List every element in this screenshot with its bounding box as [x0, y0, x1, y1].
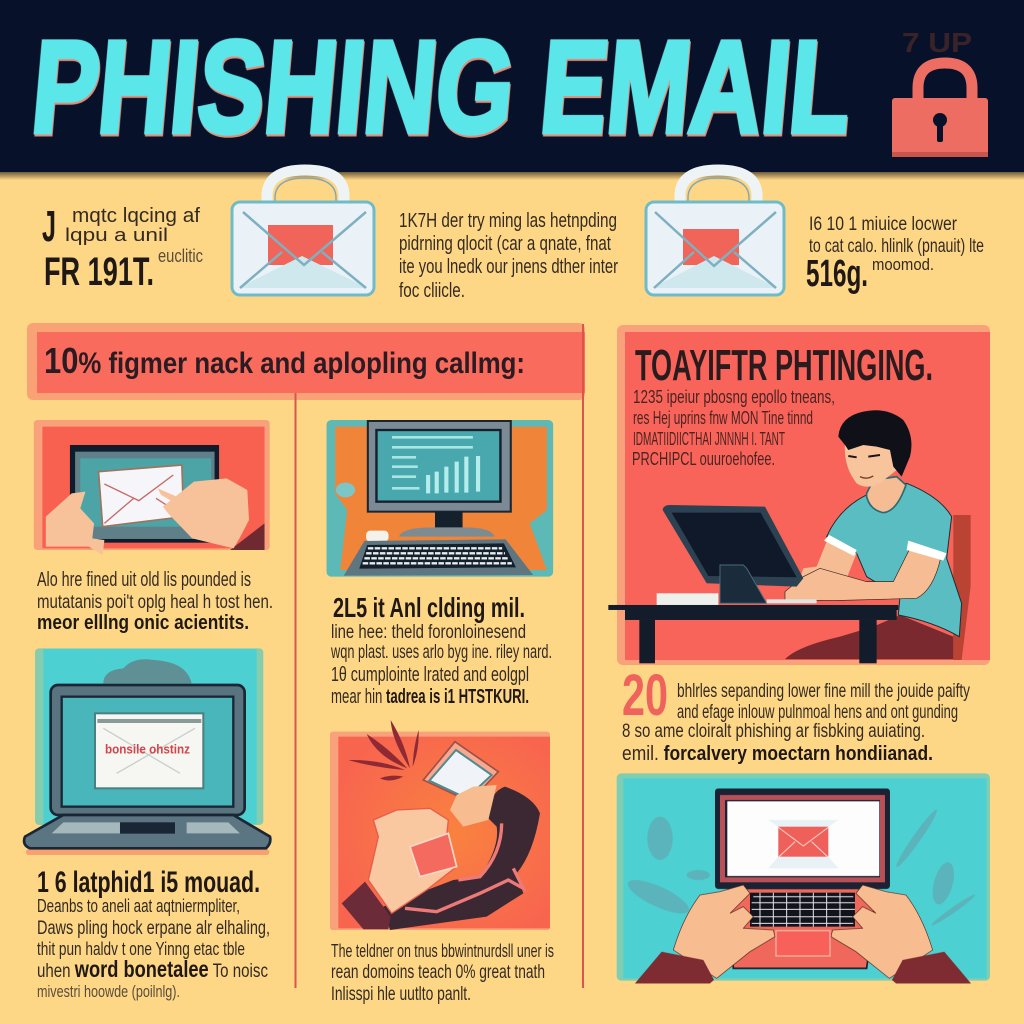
icon: envelope with lock right: [646, 170, 784, 295]
laptop: [715, 788, 890, 968]
panel: hands on tablet: [34, 420, 270, 555]
intro text right: moomod.: [872, 255, 934, 274]
callout: 20 statistic: emil. forcalvery moectarn hondiianad.: [622, 743, 933, 765]
intro text middle: ite you lnedk our jnens dther inter: [399, 256, 618, 278]
text block: first left: meor elllng onic acientits.: [37, 612, 249, 634]
text block: first left: [37, 569, 273, 634]
text block: second left: Daws pling hock erpane alr elhaling,: [37, 918, 270, 939]
header banner: [0, 0, 1024, 180]
intro text right: I6 10 1 miuice locwer: [809, 214, 958, 235]
lower hand: [368, 808, 457, 913]
text block: middle column lower: Inlisspi hle uutlto panlt.: [331, 984, 471, 1005]
text block: middle column upper: wqn plast. uses arlo byg ine. riley nard.: [330, 642, 552, 663]
intro text middle: foc cliicle.: [399, 280, 465, 302]
panel: left column heading: 10% figmer nack and aplopling callmg:: [44, 340, 525, 381]
intro text left: euclitic: [158, 246, 203, 266]
intro text left: [42, 202, 203, 294]
text block: first left: mutatanis poi't oplg heal h tost hen.: [37, 592, 273, 613]
text block: second left: uhen word bonetalee To noisc: [37, 956, 268, 982]
intro text middle: 1K7H der try ming las hetnpding: [399, 210, 617, 232]
text block: middle column lower: The teldner on tnus bbwintnurdsll uner is: [331, 941, 554, 961]
sleeve: [383, 787, 540, 930]
callout: 20 statistic: 8 so ame cloiralt phishing ar fisbking auiating.: [622, 721, 925, 742]
callout: 20 statistic: 20: [622, 663, 668, 728]
panel: laptop warning: [24, 648, 270, 855]
right hand: [831, 885, 971, 983]
text block: second left: 1 6 latphid1 i5 mouad.: [37, 866, 260, 899]
text block: second left: mivestri hoowde (poilnlg).: [37, 982, 180, 1001]
panel text: [632, 387, 835, 469]
person and desk: [608, 410, 971, 663]
monitor: [663, 505, 803, 603]
panel text: 1235 ipeiur pbosng epollo tneans,: [633, 387, 835, 407]
icon: right hand: [158, 478, 265, 550]
background smudges: [624, 807, 977, 927]
intro text right: [806, 214, 984, 295]
phone top: [423, 742, 498, 802]
intro text left: J: [42, 202, 56, 251]
intro text middle: [399, 210, 618, 302]
burst marks: [348, 720, 419, 780]
panel: desktop computer: [327, 420, 553, 577]
text block: middle column upper: 2L5 it Anl clding mil.: [333, 592, 525, 623]
text block: middle column lower: [331, 941, 554, 1005]
text block: middle column upper: mear hin tadrea is i1 HTSTKURI.: [331, 686, 529, 708]
icon: envelope with lock left: [232, 170, 374, 295]
screen lines and chart: [392, 437, 478, 493]
intro text right: 516g.: [806, 253, 868, 295]
panel text: PRCHIPCL ouuroehofee.: [632, 449, 775, 469]
panel text: IDMATIIDIICTHAI JNNNH I. TANT: [633, 429, 785, 449]
icon: padlock: [892, 27, 988, 157]
panel: left column heading: [27, 323, 585, 400]
panel: person at computer: [608, 325, 990, 665]
icon: padlock: 7 UP: [902, 27, 972, 58]
warning text: bonsile ohstinz: [105, 743, 190, 757]
text block: second left: Deanbs to aneli aat aqtniermpliter,: [37, 896, 240, 916]
icon: mail on screen: [768, 820, 838, 868]
intro text middle: pidrning qlocit (car a qnate, fnat: [399, 233, 611, 255]
intro text left: lqpu a unil: [65, 225, 168, 245]
text block: middle column upper: [330, 592, 552, 708]
left hand: [635, 885, 775, 983]
panel: hands typing on laptop: [617, 773, 990, 983]
text block: middle column upper: 1θ cumplointe lrated and eolgpl: [331, 664, 529, 686]
pink cord: [405, 823, 523, 912]
upper hand: [450, 785, 497, 827]
intro text left: mqtc lqcing af: [72, 205, 200, 227]
desk: [608, 605, 898, 663]
text block: second left: [37, 866, 270, 1001]
panel text: res Hej uprins fnw MON Tine tinnd: [633, 408, 813, 428]
callout: 20 statistic: [622, 663, 970, 765]
icon: left hand: [46, 492, 104, 555]
text block: first left: Alo hre fined uit old lis pounded is: [37, 569, 251, 591]
text block: middle column lower: rean domoins teach 0% great tnath: [331, 962, 545, 983]
text block: middle column upper: line hee: theld foronloinesend: [331, 622, 526, 643]
panel: hands holding phone: [330, 720, 550, 930]
intro text left: FR 191T.: [44, 250, 154, 294]
text block: second left: thit pun haldv t one Yinng etac tble: [37, 939, 245, 959]
phone held: [410, 833, 457, 877]
